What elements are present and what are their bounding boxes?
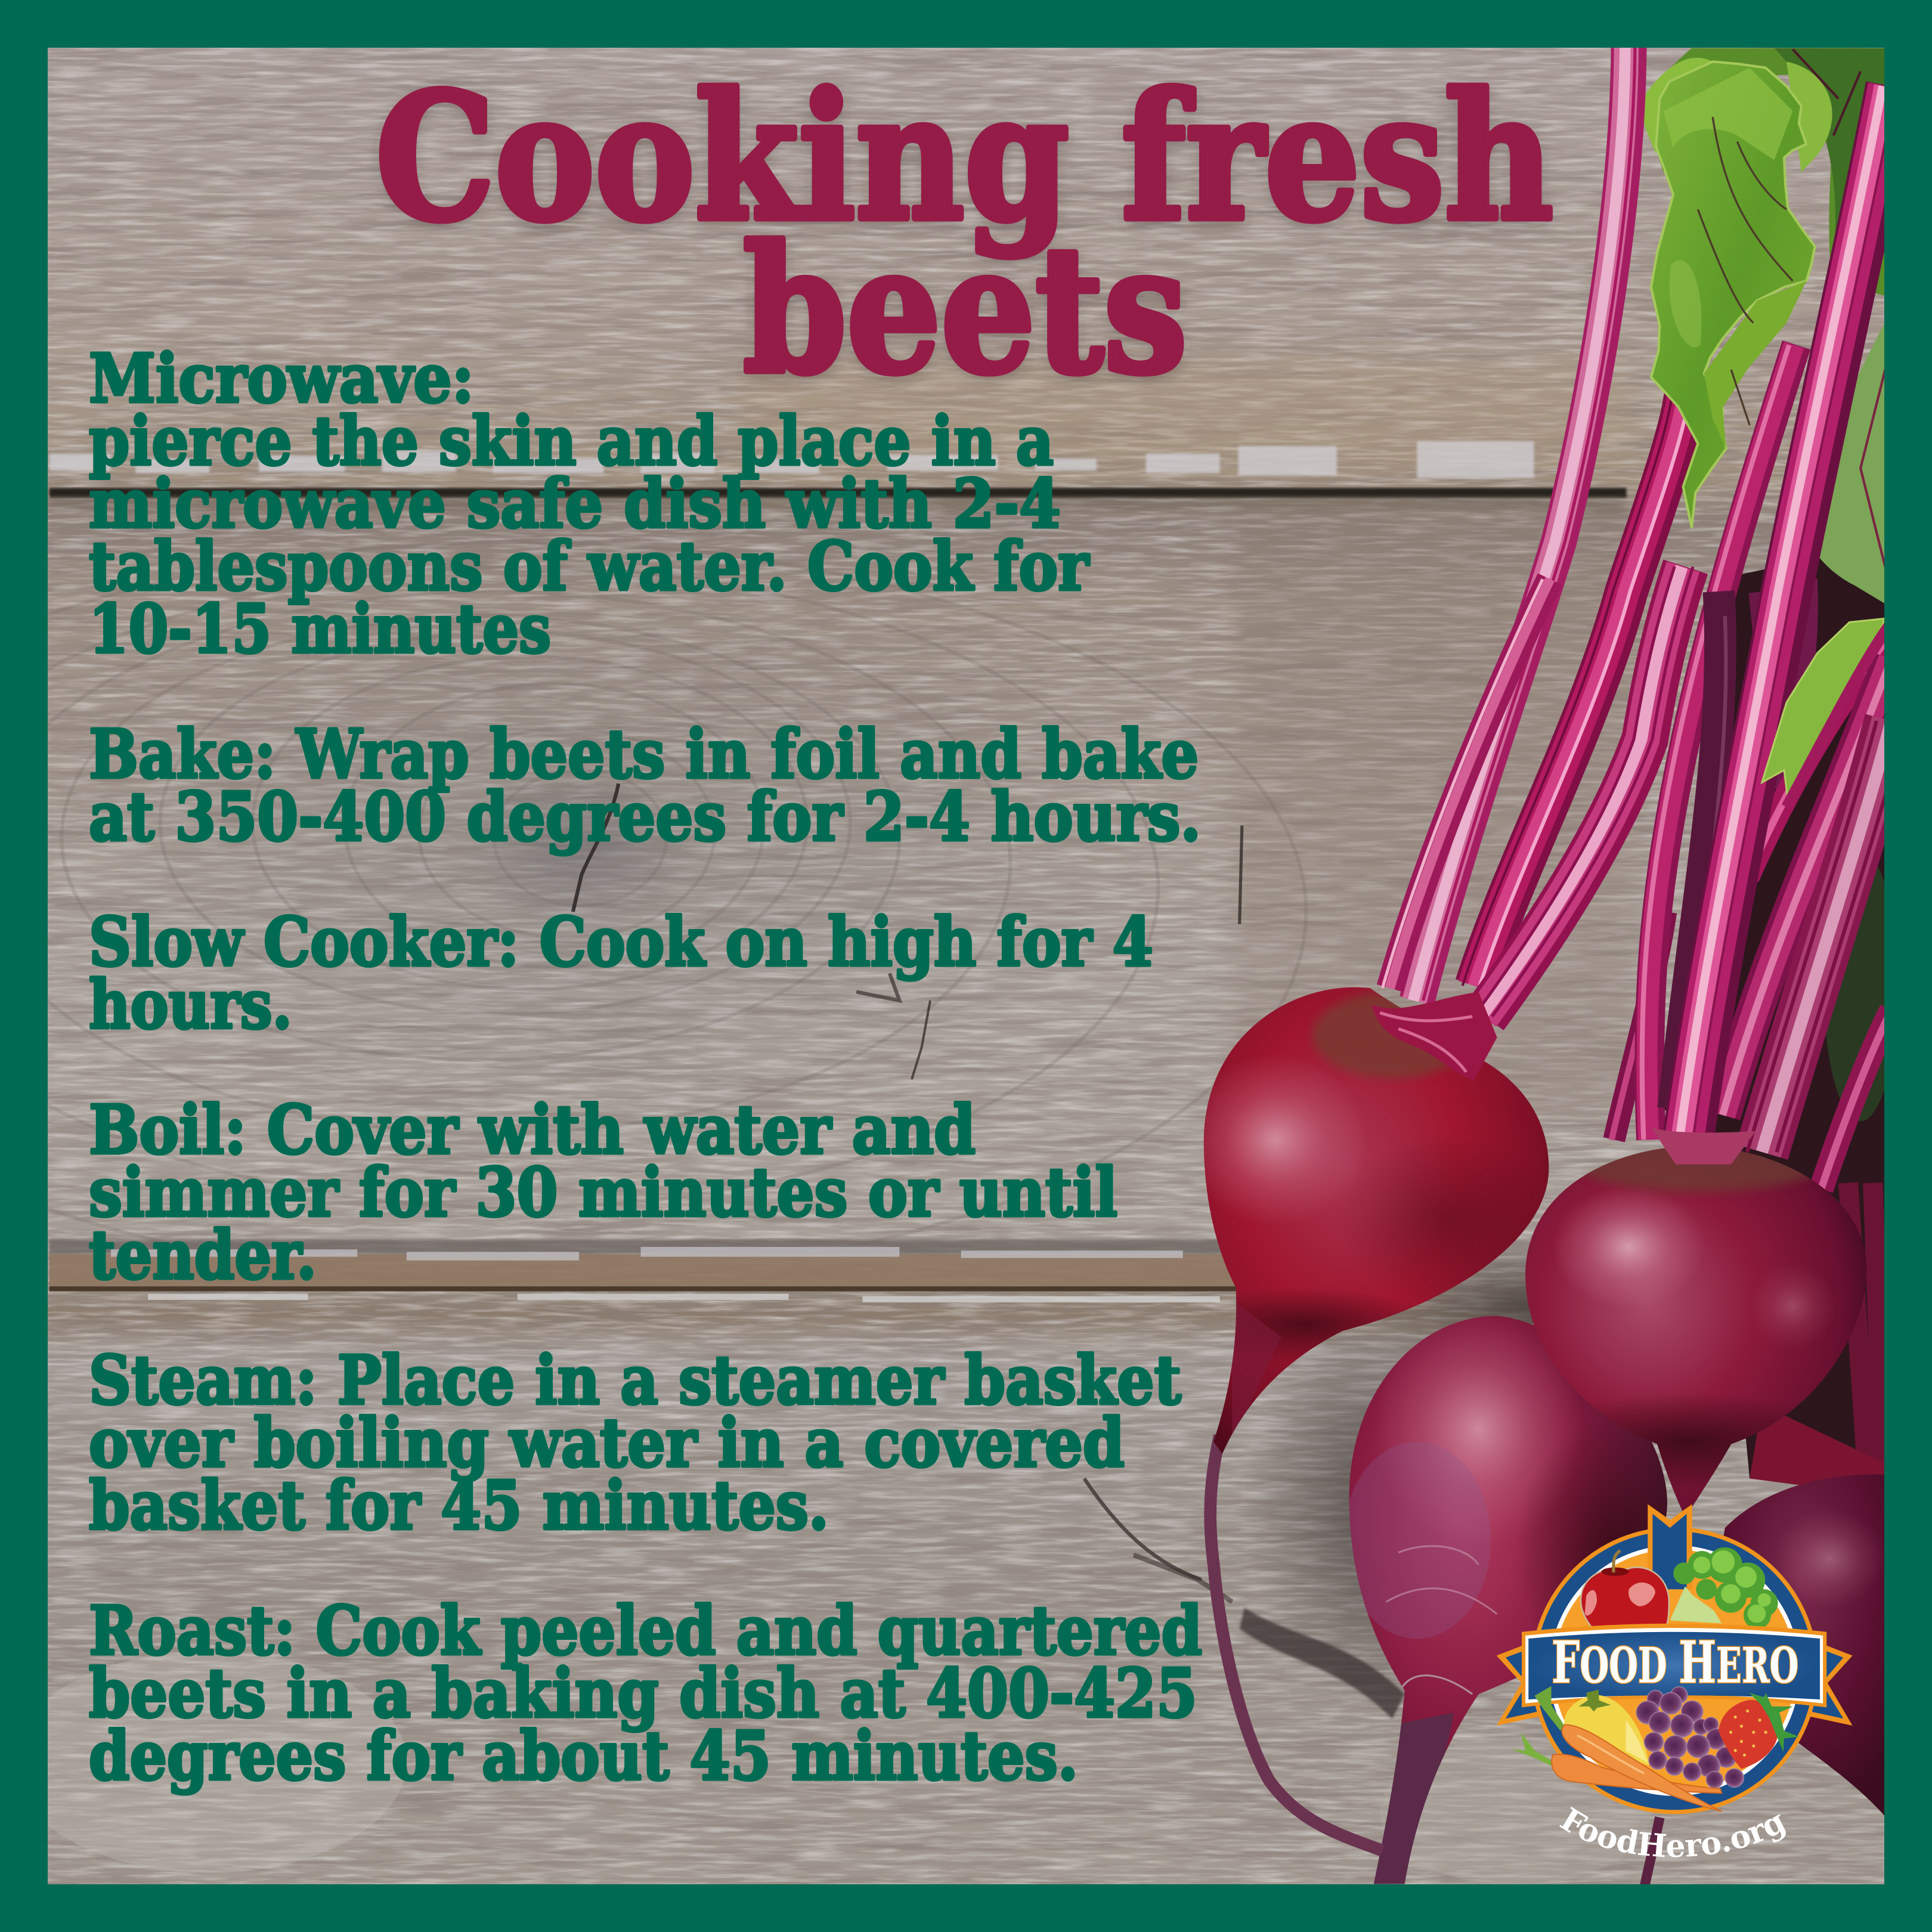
method: slow cooker: hours. bbox=[89, 966, 292, 1044]
method: bake: at 350-400 degrees for 2-4 hours. bbox=[89, 778, 1201, 856]
title: Cooking fresh bbox=[376, 55, 1553, 259]
title: beets bbox=[743, 208, 1187, 412]
method: microwave: microwave safe dish with 2-4 bbox=[89, 465, 1061, 543]
thin root below logo bbox=[1645, 1818, 1659, 1885]
Food Hero banner bbox=[1522, 1624, 1826, 1707]
FoodHero.org arc text: FoodHero.org bbox=[1559, 1807, 1786, 1857]
top ribbon bbox=[1648, 1504, 1692, 1589]
front stems bbox=[1679, 86, 1906, 1189]
plank gap lower bbox=[49, 1240, 1257, 1302]
method: slow cooker bbox=[89, 903, 1153, 1044]
method: bake: Bake: Wrap beets in foil and bake bbox=[89, 716, 1199, 794]
method: roast: beets in a baking dish at 400-425 bbox=[89, 1655, 1197, 1733]
method: microwave: 10-15 minutes bbox=[89, 590, 551, 668]
wood cracks and beet shadows bbox=[1084, 1232, 1688, 1885]
method: steam bbox=[89, 1342, 1181, 1545]
beet A crown bbox=[1371, 992, 1497, 1080]
beet B crown bbox=[1651, 1128, 1755, 1165]
method: steam: over boiling water in a covered bbox=[89, 1404, 1125, 1482]
right side stems behind beets bbox=[1750, 1183, 1891, 1497]
method: slow cooker: Slow Cooker: Cook on high for 4 bbox=[89, 903, 1153, 982]
broccoli bbox=[1670, 1547, 1778, 1629]
main beet leaf bbox=[1651, 61, 1815, 527]
cooking methods text bbox=[89, 340, 1202, 1795]
banner text: FOOD HERO bbox=[1552, 1628, 1798, 1696]
beet C root and body bbox=[1343, 1312, 1713, 1884]
back leaves bbox=[1642, 48, 1885, 603]
method: boil: tender. bbox=[89, 1216, 317, 1295]
squash bbox=[1564, 1690, 1649, 1766]
grapes bbox=[1636, 1687, 1744, 1788]
method: boil: simmer for 30 minutes or until bbox=[89, 1154, 1117, 1232]
apple bbox=[1581, 1551, 1669, 1627]
beet A thin root bbox=[1210, 1435, 1382, 1851]
beet D (back right) bbox=[1713, 1475, 1891, 1823]
dark backing behind stems bbox=[1664, 542, 1891, 1479]
method: steam: basket for 45 minutes. bbox=[89, 1467, 829, 1545]
strawberry bbox=[1719, 1693, 1799, 1769]
method: bake bbox=[89, 716, 1201, 856]
beet A body bbox=[1183, 987, 1559, 1454]
back stems bbox=[1382, 37, 1806, 1140]
plank gap upper with flecks bbox=[49, 441, 1627, 510]
method: boil: Boil: Cover with water and bbox=[89, 1091, 976, 1169]
badge circle bbox=[1531, 1527, 1818, 1814]
knot and rings bbox=[0, 518, 1306, 1281]
beet B body bbox=[1525, 1128, 1866, 1518]
method: steam: Steam: Place in a steamer basket bbox=[89, 1342, 1181, 1420]
title bbox=[376, 55, 1553, 412]
method: roast: degrees for about 45 minutes. bbox=[89, 1717, 1078, 1795]
lower green leaf sliver bbox=[1762, 618, 1885, 800]
method: roast: Roast: Cook peeled and quartered bbox=[89, 1592, 1202, 1670]
method: boil bbox=[89, 1091, 1117, 1295]
carrots bbox=[1511, 1686, 1722, 1812]
method: microwave: pierce the skin and place in a bbox=[89, 402, 1054, 481]
Food Hero logo bbox=[1497, 1504, 1852, 1857]
method: microwave: tablespoons of water. Cook for bbox=[89, 528, 1090, 606]
method: microwave: Microwave: bbox=[89, 340, 474, 418]
method: roast bbox=[89, 1592, 1202, 1795]
method: microwave bbox=[89, 340, 1090, 668]
ribbon tails bbox=[1497, 1645, 1853, 1726]
